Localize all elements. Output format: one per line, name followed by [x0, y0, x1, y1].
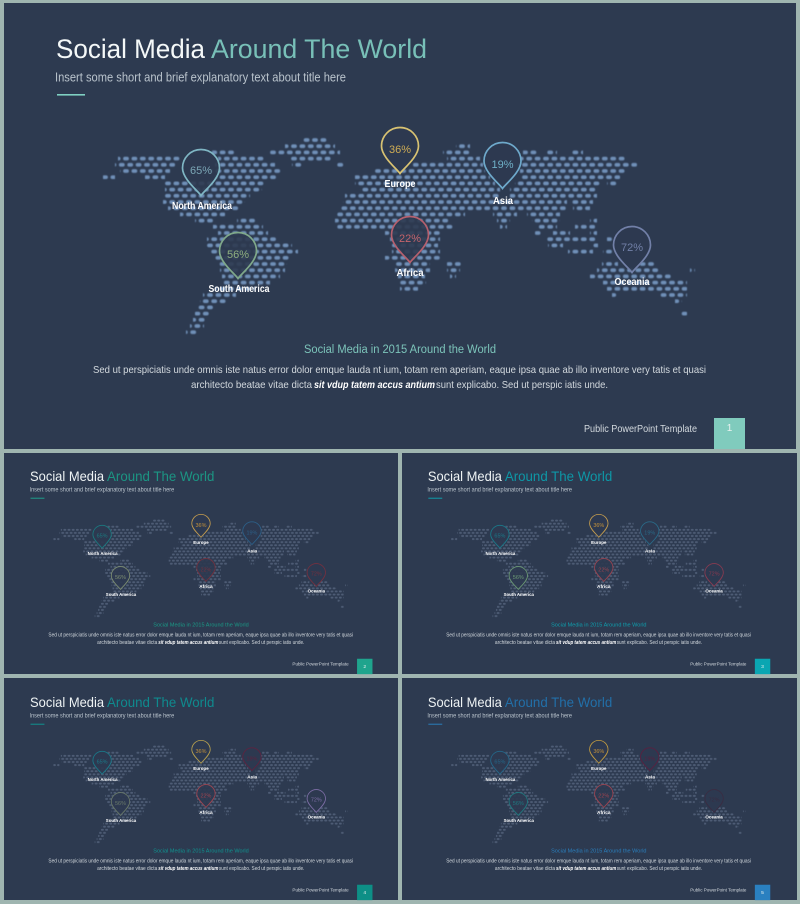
- slide 4 pins: Oceania: [308, 815, 325, 821]
- slide 5 pins: 19%: [644, 756, 655, 762]
- slide 4 underline: [31, 723, 44, 726]
- slide 2 pins: Asia: [247, 548, 257, 554]
- slide 2 pins: 56%: [115, 575, 126, 581]
- pin: North America 65%: [172, 150, 232, 212]
- body text: [93, 364, 706, 391]
- slide 4 body text: sunt explicabo. Sed ut perspic iatis unde.: [219, 866, 304, 872]
- pin: Asia 19%: [484, 142, 521, 207]
- slide 3 map: [451, 521, 745, 616]
- pin: Oceania 72%: [614, 226, 650, 288]
- pin: Europe 36%: Europe: [384, 179, 416, 190]
- slide 2 pins: 65%: [97, 533, 108, 539]
- slide 3 pins: 56%: [513, 575, 524, 581]
- slide 3 title: Social Media: [428, 469, 502, 484]
- pin: South America 56%: South America: [208, 284, 270, 295]
- slide 4 pins: 72%: [311, 798, 322, 804]
- slide 2 body text: sunt explicabo. Sed ut perspic iatis unde.: [219, 640, 304, 646]
- slide 4 title: Around The World: [107, 695, 214, 710]
- slide 5 page number: 5: [761, 890, 764, 896]
- panel: slide 4 teal theme: [4, 678, 398, 900]
- slide 2 caption: Social Media in 2015 Around the World: [153, 622, 249, 628]
- slide 5 pins: Europe: [591, 766, 607, 772]
- pin: Africa 22%: [392, 216, 428, 279]
- slide 4 body text: sit vdup tatem accus antium: [158, 866, 219, 872]
- slide 5 pins: South America: [504, 818, 534, 824]
- slide 4 caption: Social Media in 2015 Around the World: [153, 848, 249, 854]
- slide 4 footer: Public PowerPoint Template: [292, 888, 349, 894]
- slide 3 body text: sit vdup tatem accus antium: [556, 640, 617, 646]
- pin: North America 65%: 65%: [190, 165, 212, 177]
- slide 4 pins: North America: [88, 777, 118, 783]
- slide 5 caption: Social Media in 2015 Around the World: [551, 848, 647, 854]
- slide 5 pins: North America: [485, 777, 516, 783]
- body text: sunt explicabo. Sed ut perspic iatis unde.: [436, 379, 608, 391]
- slide 5 pins: 65%: [494, 759, 506, 765]
- slide 4 body text: [48, 858, 353, 872]
- pin: North America 65%: North America: [172, 201, 232, 212]
- pin: Asia 19%: Asia: [493, 196, 513, 207]
- slide 3 body text: [446, 632, 751, 646]
- pin: South America 56%: 56%: [227, 249, 249, 261]
- panel: slide 5 blue theme: [402, 678, 797, 900]
- slide 2 footer: Public PowerPoint Template: [292, 662, 349, 668]
- slide 4 pins: 22%: [201, 793, 212, 799]
- slide 4 pins: 19%: [246, 756, 258, 762]
- slide 2 title: [30, 469, 214, 484]
- slide 3 footer: Public PowerPoint Template: [690, 662, 747, 668]
- slide 3 pins: Asia: [645, 548, 655, 554]
- pin: Asia 19%: 19%: [491, 159, 514, 171]
- slide 5 body text: sunt explicabo. Sed ut perspic iatis unde.: [617, 866, 702, 872]
- slide 2 title: Around The World: [107, 469, 214, 484]
- slide 4 pins: Asia: [247, 774, 257, 780]
- slide 4 pins: South America: [106, 818, 136, 824]
- slide 4 pins: [88, 740, 325, 824]
- slide 2 pins: 72%: [311, 572, 322, 578]
- slide 3 caption: Social Media in 2015 Around the World: [551, 622, 647, 628]
- slide 4 pins: 65%: [97, 759, 108, 765]
- footer label: Public PowerPoint Template: [584, 424, 697, 435]
- slide 2 body text: sit vdup tatem accus antium: [158, 640, 219, 646]
- slide 2 underline: [31, 497, 44, 500]
- pin: Europe 36%: [382, 128, 418, 190]
- slide 4 body text: architecto beatae vitae dicta: [97, 866, 157, 872]
- slide 2 pins: Africa: [199, 584, 213, 590]
- slide 3 title: [428, 469, 612, 484]
- body text: architecto beatae vitae dicta: [191, 379, 312, 391]
- slide 4 subtitle: Insert some short and brief explanatory text about title here: [30, 713, 175, 720]
- slide 2 page number: [357, 659, 372, 674]
- slide 2 pins: Europe: [193, 540, 209, 546]
- pin: Europe 36%: 36%: [389, 144, 411, 156]
- slide 3 pins: 65%: [494, 533, 506, 539]
- slide 4 body text: Sed ut perspiciatis unde omnis iste natus error dolor emque lauda nt ium, totam rem aperiam, eaque ipsa quae ab illo inventore very tatis et quasi: [48, 858, 353, 864]
- slide 5 pins: 22%: [598, 793, 609, 799]
- slide 3 pins: 72%: [709, 572, 720, 578]
- slide 2 pins: Oceania: [308, 589, 325, 595]
- slide 4 map: [53, 747, 348, 842]
- panel: main slide 1: [4, 3, 796, 449]
- slide 2 pins: South America: [106, 592, 136, 598]
- slide 5 title: Around The World: [505, 695, 612, 710]
- panel: slide 2 green theme: [4, 453, 398, 674]
- slide 3 pins: South America: [504, 592, 534, 598]
- slide 5 pins: [485, 740, 723, 824]
- pin: Africa 22%: Africa: [396, 268, 424, 279]
- slide 3 pins: North America: [485, 551, 516, 557]
- slide 5 pins: 36%: [593, 749, 604, 755]
- slide 3 body text: architecto beatae vitae dicta: [495, 640, 555, 646]
- slide 2 page number: 2: [363, 664, 366, 670]
- slide 5 footer: Public PowerPoint Template: [690, 888, 747, 894]
- page number box: 1: [727, 423, 733, 434]
- slide 2 pins: 22%: [201, 567, 212, 573]
- slide 4 pins: 56%: [115, 801, 126, 807]
- caption heading: Social Media in 2015 Around the World: [304, 344, 496, 356]
- title: Social Media: [56, 34, 206, 64]
- pin: Oceania 72%: Oceania: [614, 277, 650, 288]
- body text: sit vdup tatem accus antium: [314, 379, 435, 391]
- slide 5 body text: Sed ut perspiciatis unde omnis iste natus error dolor emque lauda nt ium, totam rem aperiam, eaque ipsa quae ab illo inventore very tatis et quasi: [446, 858, 751, 864]
- slide 3 pins: Europe: [591, 540, 607, 546]
- slide 3 pins: 36%: [593, 523, 604, 529]
- page number box: [714, 418, 745, 449]
- panel: slide 3 cyan theme: [402, 453, 797, 674]
- slide 2 pins: 36%: [196, 523, 207, 529]
- slide 3 body text: sunt explicabo. Sed ut perspic iatis unde.: [617, 640, 702, 646]
- slide 2 map: [53, 521, 348, 616]
- body text: Sed ut perspiciatis unde omnis iste natus error dolor emque lauda nt ium, totam rem aperiam, eaque ipsa quae ab illo inventore very tatis et quasi: [93, 364, 706, 376]
- slide 3 title: Around The World: [505, 469, 612, 484]
- slide 5 subtitle: Insert some short and brief explanatory text about title here: [427, 713, 572, 720]
- title: [56, 34, 427, 64]
- slide 5 pins: Oceania: [705, 815, 723, 821]
- slide 5 pins: Africa: [597, 810, 611, 816]
- slide 4 pins: Europe: [193, 766, 209, 772]
- slide 5 body text: [446, 858, 751, 872]
- slide 3 page number: [755, 659, 770, 674]
- slide 3 page number: 3: [761, 664, 764, 670]
- slide 4 title: [30, 695, 214, 710]
- slide 2 pins: North America: [88, 551, 118, 557]
- slide 5 title: [428, 695, 612, 710]
- slide 2 body text: architecto beatae vitae dicta: [97, 640, 157, 646]
- slide 3 underline: [428, 497, 442, 500]
- subtitle: Insert some short and brief explanatory text about title here: [55, 70, 346, 84]
- title: Around The World: [211, 34, 427, 64]
- slide 4 pins: Africa: [199, 810, 213, 816]
- slide 4 page number: [357, 885, 372, 900]
- slide 2 body text: [48, 632, 353, 646]
- slide 4 title: Social Media: [30, 695, 105, 710]
- slide 3 pins: 22%: [598, 567, 609, 573]
- slide 3 pins: Africa: [597, 584, 611, 590]
- slide 4 pins: 36%: [196, 749, 207, 755]
- slide 2 pins: 19%: [246, 530, 258, 536]
- title underline: [57, 94, 85, 96]
- slide 2 pins: [88, 514, 325, 598]
- slide 2 title: Social Media: [30, 469, 105, 484]
- slide 5 page number: [755, 885, 770, 900]
- slide 3 subtitle: Insert some short and brief explanatory text about title here: [427, 487, 572, 494]
- slide 5 pins: 72%: [709, 798, 720, 804]
- dotted world map: [103, 140, 695, 332]
- slide 5 title: Social Media: [428, 695, 502, 710]
- pin: South America 56%: [208, 232, 270, 295]
- pin: Oceania 72%: 72%: [621, 242, 643, 254]
- slide 3 body text: Sed ut perspiciatis unde omnis iste natus error dolor emque lauda nt ium, totam rem aperiam, eaque ipsa quae ab illo inventore very tatis et quasi: [446, 632, 751, 638]
- slide 5 underline: [428, 723, 442, 726]
- slide 3 pins: [485, 514, 723, 598]
- slide 3 pins: Oceania: [705, 589, 723, 595]
- slide 5 body text: architecto beatae vitae dicta: [495, 866, 555, 872]
- slide 5 pins: 56%: [513, 801, 524, 807]
- slide 5 pins: Asia: [645, 774, 655, 780]
- slide 3 pins: 19%: [644, 530, 655, 536]
- slide 5 map: [451, 747, 745, 842]
- slide 5 body text: sit vdup tatem accus antium: [556, 866, 617, 872]
- slide 4 page number: 4: [363, 890, 366, 896]
- slide 2 body text: Sed ut perspiciatis unde omnis iste natus error dolor emque lauda nt ium, totam rem aperiam, eaque ipsa quae ab illo inventore very tatis et quasi: [48, 632, 353, 638]
- slide 2 subtitle: Insert some short and brief explanatory text about title here: [30, 487, 175, 494]
- pin: Africa 22%: 22%: [399, 233, 421, 245]
